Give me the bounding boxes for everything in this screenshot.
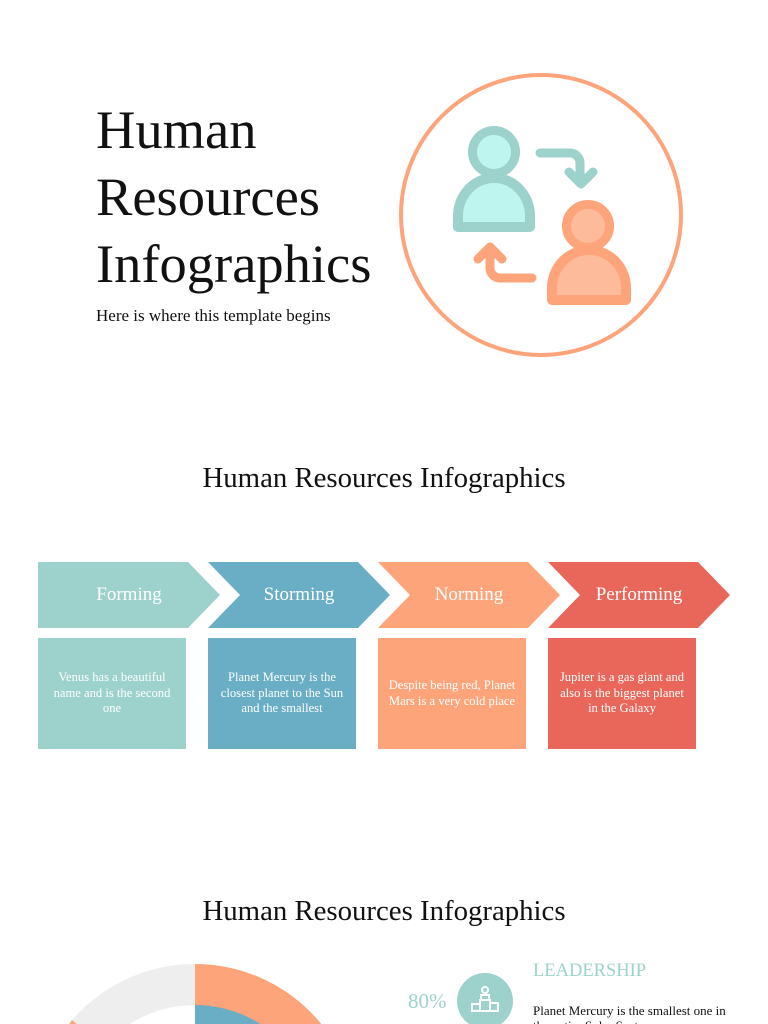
box: forming text <box>38 638 186 749</box>
box: performing text: Jupiter is a gas giant and also is the biggest planet in the Galaxy <box>560 670 684 715</box>
label: Forming: Forming <box>96 584 162 605</box>
title: Infographics <box>96 233 371 294</box>
donut chart <box>69 964 322 1024</box>
box: performing text <box>548 638 696 749</box>
label: Performing: Performing <box>596 584 682 605</box>
heading: section 2: Human Resources Infographics <box>202 895 566 927</box>
arrow: bottom <box>478 247 532 278</box>
title: Human <box>96 99 256 160</box>
label: Norming: Norming <box>435 584 503 605</box>
box: storming text: Planet Mercury is the closest planet to the Sun and the smallest <box>221 670 343 715</box>
title <box>96 99 371 294</box>
title: Resources <box>96 166 320 227</box>
stat: 80%: 80% <box>408 989 446 1013</box>
box: forming text: Venus has a beautiful name and is the second one <box>54 670 170 715</box>
subtitle: Here is where this template begins <box>96 306 331 325</box>
label: Storming: Storming <box>264 584 334 605</box>
arrow: top <box>540 153 593 184</box>
person 2 <box>552 204 626 300</box>
heading: leadership: LEADERSHIP <box>533 961 646 981</box>
icon: leadership podium <box>457 973 513 1024</box>
chevrons <box>38 562 730 628</box>
box: norming text: Despite being red, Planet Mars is a very cold place <box>389 678 515 708</box>
box: norming text <box>378 638 526 749</box>
heading: section 1: Human Resources Infographics <box>202 462 566 494</box>
person 1 <box>458 130 530 227</box>
icon: HR exchange circle <box>399 73 683 357</box>
box: storming text <box>208 638 356 749</box>
